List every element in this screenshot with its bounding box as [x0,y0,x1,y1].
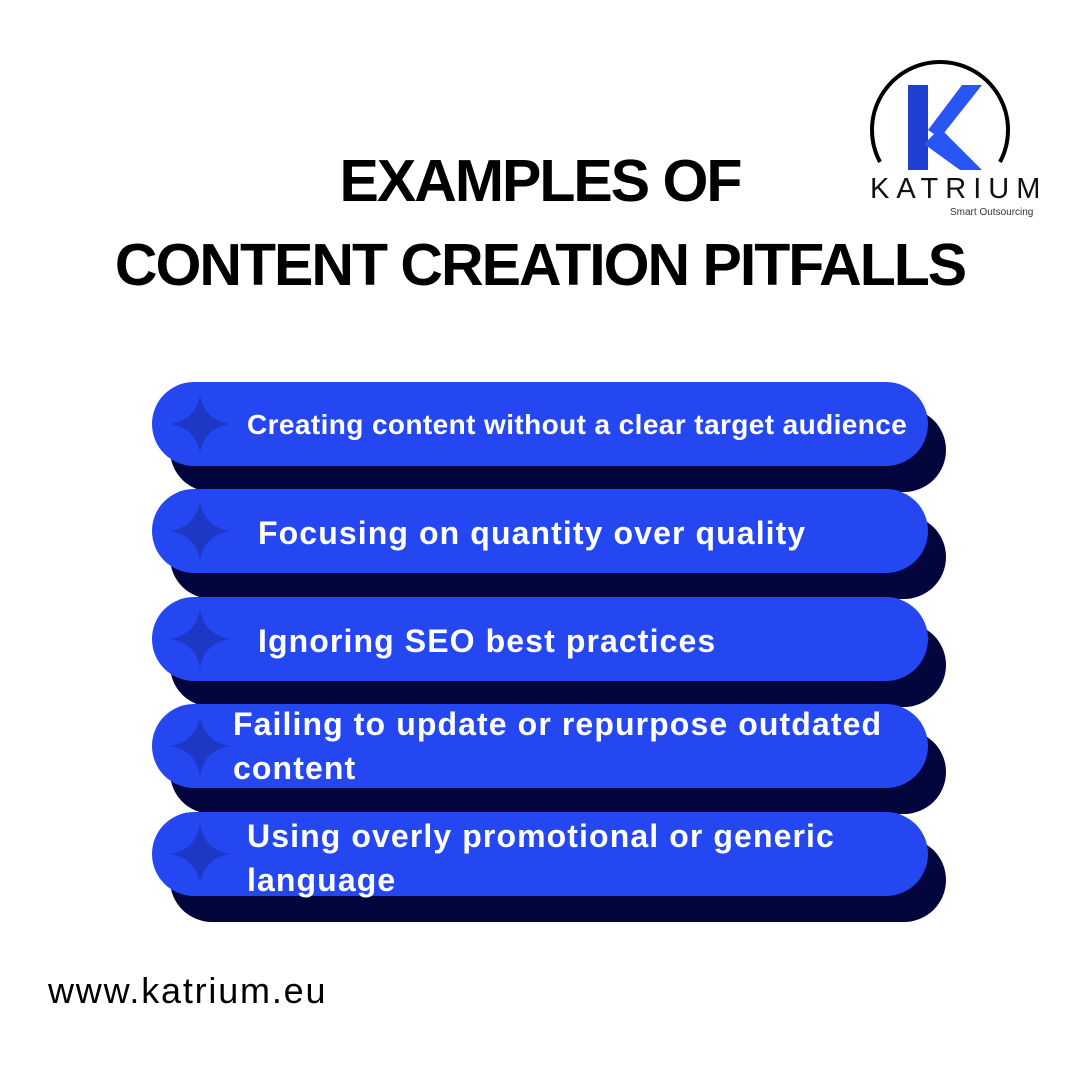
card 2 [152,489,946,599]
text: EXAMPLES OF [340,148,740,214]
card 5 [152,812,946,922]
website: www.katrium.eu [48,970,327,1011]
card 1: Creating content without a clear target audience [247,409,907,440]
card 3 [152,597,946,707]
card 5: Using overly promotional or generic [247,818,835,854]
card 2: Focusing on quantity over quality [258,515,806,551]
card 3: Ignoring SEO best practices [258,623,716,659]
card 1 [152,382,946,492]
card 4 [152,704,946,814]
logo: KATRIUM [870,173,1047,205]
text: CONTENT CREATION PITFALLS [115,232,965,298]
card 4: Failing to update or repurpose outdated [233,706,882,742]
logo: Smart Outsourcing [950,207,1033,218]
title [115,148,965,298]
card 4: content [233,750,356,786]
card 5: language [247,862,396,898]
logo [870,60,1047,218]
